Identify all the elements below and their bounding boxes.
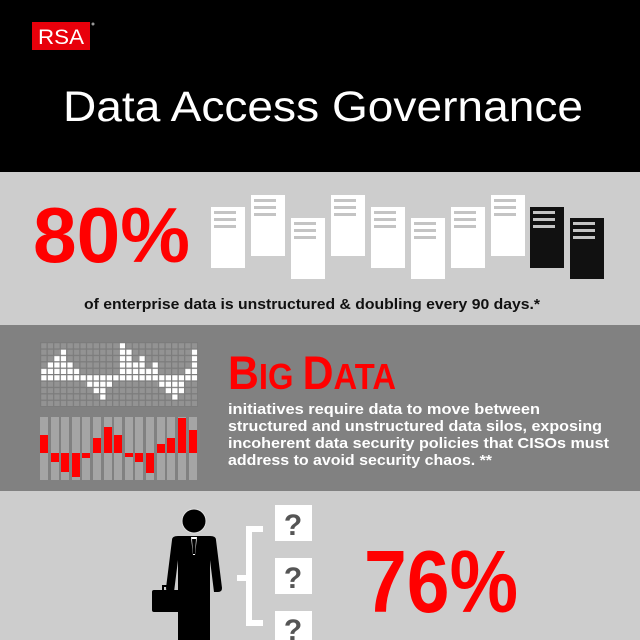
caption: unstructured data: of enterprise data is unstructured & doubling every 90 days.* [84, 297, 540, 313]
text block: big data description: address to avoid security chaos. ** [228, 452, 492, 469]
icon: businessman [152, 509, 222, 640]
title: Data Access Governance [63, 83, 583, 131]
text block: big data description: initiatives require data to move between [228, 401, 540, 418]
icon: question boxes: ? [284, 562, 302, 595]
text block: big data description [228, 401, 609, 469]
chart: red bars [40, 417, 197, 480]
heading: Big Data: BIG DATA [228, 346, 396, 399]
text block: big data description: incoherent data security policies that CISOs must [228, 435, 609, 452]
text block: big data description: structured and unstructured data silos, exposing [228, 418, 602, 435]
chart: pixel waveform [40, 342, 198, 407]
logo: RSA [32, 22, 94, 50]
logo: RSA: RSA [38, 26, 84, 49]
icon: question boxes [275, 505, 312, 640]
stat: 76%: 76% [364, 532, 518, 631]
stat: 80%: 80% [33, 191, 190, 279]
icon: bracket [237, 529, 263, 623]
icon: question boxes: ? [284, 509, 302, 542]
icon: servers [211, 195, 604, 279]
